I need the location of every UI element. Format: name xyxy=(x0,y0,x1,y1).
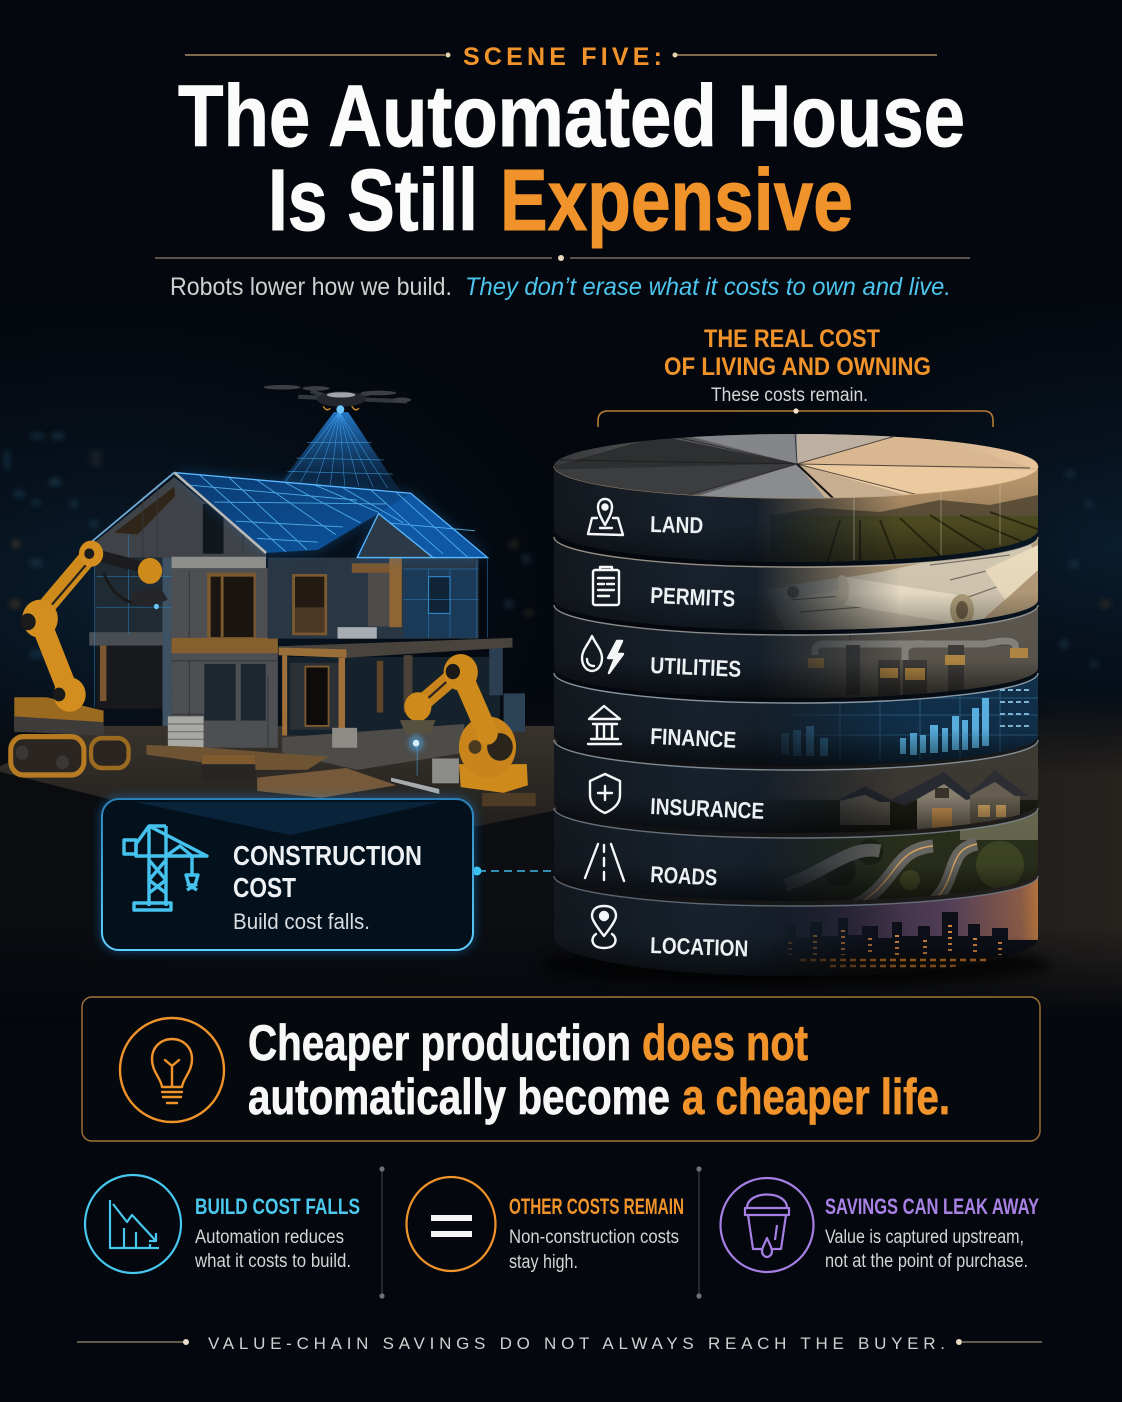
takeaway: build cost falls xyxy=(85,1175,360,1273)
icon: water and power xyxy=(582,636,623,673)
card: construction cost xyxy=(102,799,473,950)
takeaway: build cost falls: what it costs to build. xyxy=(194,1251,351,1272)
drone xyxy=(264,385,411,414)
title: Is Still xyxy=(268,152,478,249)
footer line: VALUE-CHAIN SAVINGS DO NOT ALWAYS REACH THE BUYER. xyxy=(208,1334,945,1353)
card: construction cost: COST xyxy=(233,872,296,903)
eyebrow: scene five: SCENE FIVE: xyxy=(463,43,662,71)
icon: tower crane xyxy=(124,826,207,910)
house walls xyxy=(89,477,479,748)
building materials xyxy=(146,716,536,806)
heading: the real cost of living and owning: THE REAL COST xyxy=(704,325,880,353)
takeaway: savings can leak away: Value is captured upstream, xyxy=(825,1227,1024,1248)
disc: roads: ROADS xyxy=(650,861,718,890)
robot arm: left xyxy=(11,541,168,775)
disc: permits: PERMITS xyxy=(650,582,736,612)
takeaway: build cost falls: BUILD COST FALLS xyxy=(195,1194,360,1219)
background xyxy=(0,368,1122,1000)
disc: location: LOCATION xyxy=(650,932,749,961)
icon: shield xyxy=(590,774,620,813)
icon: equals xyxy=(406,1177,496,1271)
illustration: automated house under construction xyxy=(0,385,557,845)
cost stack xyxy=(540,425,1051,990)
eyebrow: scene five xyxy=(185,43,937,71)
subtitle xyxy=(170,273,951,301)
disc: land xyxy=(553,466,1039,562)
divider xyxy=(379,1166,385,1299)
takeaway: other costs remain: Non-construction costs xyxy=(509,1227,679,1248)
icon: light bulb xyxy=(120,1018,224,1122)
connector: construction to stack xyxy=(472,866,556,876)
disc: insurance xyxy=(553,740,1039,833)
heading: the real cost of living and owning xyxy=(664,325,931,406)
takeaway: build cost falls: Automation reduces xyxy=(195,1227,344,1248)
icon: location pin xyxy=(592,906,616,948)
icon: leaking bucket xyxy=(720,1178,814,1272)
divider xyxy=(696,1166,702,1299)
callout panel: Cheaper production xyxy=(248,1015,631,1071)
subtitle: Robots lower how we build. xyxy=(170,273,452,301)
card: construction cost: CONSTRUCTION xyxy=(233,840,422,871)
icon: bank xyxy=(588,706,621,744)
disc: utilities: UTILITIES xyxy=(650,652,742,682)
porch xyxy=(279,627,525,770)
drone scan beam xyxy=(280,412,400,491)
takeaway: other costs remain xyxy=(406,1177,684,1273)
robot arm: right xyxy=(400,654,528,793)
divider xyxy=(155,255,970,261)
disc: insurance: INSURANCE xyxy=(650,793,765,824)
disc: roads xyxy=(553,808,1039,901)
disc: finance xyxy=(553,673,1039,766)
disc: utilities xyxy=(553,605,1039,698)
heading: the real cost of living and owning: OF LIVING AND OWNING xyxy=(664,353,931,381)
heading: the real cost of living and owning: These costs remain. xyxy=(711,385,868,406)
title xyxy=(178,68,965,249)
title: Expensive xyxy=(500,152,853,249)
callout panel: a cheaper life. xyxy=(682,1069,950,1125)
title: The Automated House xyxy=(178,68,965,165)
disc: land: LAND xyxy=(650,511,704,538)
takeaway: savings can leak away xyxy=(720,1178,1039,1272)
icon: map pin xyxy=(588,499,623,535)
subtitle: They don’t erase what it costs to own and live. xyxy=(465,273,951,301)
callout panel: automatically become xyxy=(248,1069,670,1125)
disc: finance: FINANCE xyxy=(650,723,737,753)
takeaway: other costs remain: stay high. xyxy=(509,1252,578,1273)
icon: clipboard xyxy=(593,567,619,605)
ground platform xyxy=(0,726,557,845)
bracket xyxy=(598,408,993,427)
callout panel: does not xyxy=(642,1015,808,1071)
house windows xyxy=(204,573,450,721)
blue scanned roof xyxy=(91,473,487,707)
card: construction cost: Build cost falls. xyxy=(233,909,370,934)
takeaway: other costs remain: OTHER COSTS REMAIN xyxy=(509,1194,684,1219)
disc top: pie wedges xyxy=(554,434,1038,498)
disc: location xyxy=(553,876,1039,976)
icon: falling chart xyxy=(85,1175,181,1273)
disc: permits xyxy=(553,537,1039,630)
callout panel xyxy=(82,997,1040,1141)
icon: road xyxy=(585,844,624,881)
takeaway: savings can leak away: SAVINGS CAN LEAK AWAY xyxy=(825,1194,1039,1219)
takeaway: savings can leak away: not at the point of purchase. xyxy=(825,1251,1028,1272)
